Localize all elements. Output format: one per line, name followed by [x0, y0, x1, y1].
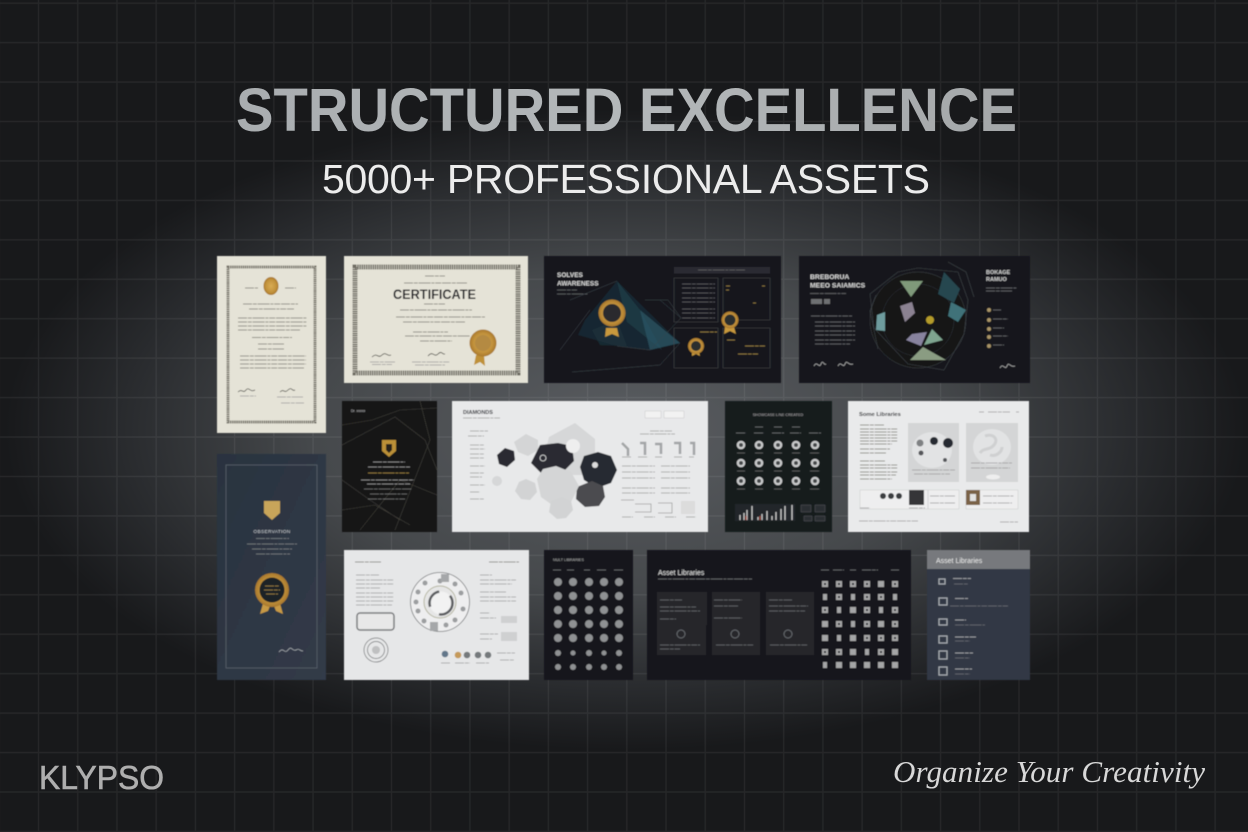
gold shield crest — [264, 501, 280, 520]
card: dark constellation portrait — [342, 401, 437, 532]
card: dark awards dashboard — [544, 256, 781, 383]
heading: CERTIFICATE — [393, 287, 476, 302]
inner frame — [226, 465, 317, 668]
header — [355, 561, 519, 563]
right text — [480, 575, 516, 639]
gold badge small — [688, 338, 704, 356]
left text — [860, 425, 898, 479]
icon grid — [822, 581, 898, 668]
card: asset libraries side panel — [927, 550, 1030, 680]
bar chart — [735, 504, 795, 521]
bottom tiles — [860, 490, 1018, 509]
left graphics — [357, 613, 394, 662]
tagline: Organize Your Creativity — [893, 754, 1205, 789]
body lines — [396, 276, 485, 341]
footer — [859, 521, 1018, 522]
signatures — [238, 389, 295, 392]
gold badge large — [598, 300, 626, 337]
card: portrait certificate — [217, 256, 326, 433]
right icons and text — [621, 431, 696, 517]
card: dark radial diagram — [799, 256, 1030, 383]
teal mesh graphic — [560, 281, 681, 372]
card: white usage sheet — [848, 401, 1029, 532]
right legend — [986, 288, 1017, 348]
list icons — [939, 579, 947, 675]
column labels — [736, 427, 821, 433]
intro lines — [557, 290, 588, 294]
hexagon cluster — [492, 423, 617, 519]
title: STRUCTURED EXCELLENCE — [236, 76, 1017, 144]
icon captions — [737, 453, 820, 489]
right heading: RAMUO — [986, 277, 1007, 283]
right heading: BOKAGE — [986, 270, 1010, 276]
left text — [810, 294, 855, 344]
panel text — [660, 600, 808, 649]
description — [247, 538, 297, 554]
chips — [811, 299, 830, 304]
bottom captions — [441, 653, 515, 663]
heading: AWARENESS — [557, 280, 599, 288]
certificate border — [228, 267, 315, 422]
gold rosette — [255, 573, 289, 614]
info panels — [657, 592, 814, 655]
top buttons — [645, 411, 684, 418]
heading: Asset Libraries — [658, 570, 705, 577]
panel icons — [677, 630, 792, 638]
icon centres — [824, 583, 896, 653]
column labels — [553, 569, 623, 571]
heading: Some Libraries — [859, 412, 901, 418]
subheading — [658, 578, 752, 580]
icon rows — [737, 441, 819, 485]
panel title: Asset Libraries — [936, 558, 983, 565]
panel: diagram left — [908, 423, 959, 482]
signatures — [372, 352, 445, 357]
heading: SOLVES — [557, 272, 584, 279]
icon grid — [554, 578, 623, 670]
card: navy portrait award — [217, 454, 326, 680]
heading: DIAMONDS — [463, 410, 493, 416]
radial diagram — [870, 262, 974, 370]
gold seal — [470, 330, 496, 366]
card: dark constellation portrait: Dr. xxxxx — [351, 409, 365, 413]
heading: SHOWCASE LINE CREATED — [753, 413, 804, 417]
subtitle: 5000+ PROFESSIONAL ASSETS — [322, 156, 930, 202]
wheel diagram — [410, 572, 470, 632]
card: white hexagon diagram — [452, 401, 708, 532]
constellation lines — [342, 401, 437, 530]
heading: MULT LIBRARIES — [553, 558, 584, 562]
heading: OBSERVATION — [253, 529, 291, 535]
heading: MEEO SAIAMICS — [810, 282, 866, 290]
card: dark icons with chart — [725, 401, 832, 532]
certificate text lines — [238, 288, 307, 368]
mini panels — [801, 505, 825, 521]
gold shield — [382, 440, 396, 457]
portrait text — [361, 462, 414, 484]
panel: diagram right — [966, 423, 1018, 482]
decorative border — [355, 267, 518, 373]
left text — [356, 575, 394, 605]
top bar — [674, 267, 770, 274]
card: landscape certificate — [344, 256, 528, 383]
panel header — [927, 550, 1030, 569]
right chips — [501, 616, 517, 641]
card: asset libraries dark wide — [647, 550, 911, 680]
list subtext — [950, 584, 1008, 674]
gold seal — [264, 277, 278, 295]
card: dark icon grid — [544, 550, 633, 680]
brand logo: KLYPSO — [39, 759, 164, 796]
panels — [674, 278, 770, 368]
list text — [953, 578, 976, 669]
icon centres — [739, 443, 817, 483]
signature — [279, 648, 303, 652]
gold badge medium — [722, 312, 738, 334]
column labels — [821, 569, 899, 571]
heading: BREBORUA — [810, 274, 849, 281]
signatures — [814, 362, 1015, 368]
header nav — [979, 411, 1019, 413]
left text column — [463, 418, 500, 499]
bottom icons — [442, 651, 491, 658]
card: white wheel sheet — [344, 550, 529, 680]
